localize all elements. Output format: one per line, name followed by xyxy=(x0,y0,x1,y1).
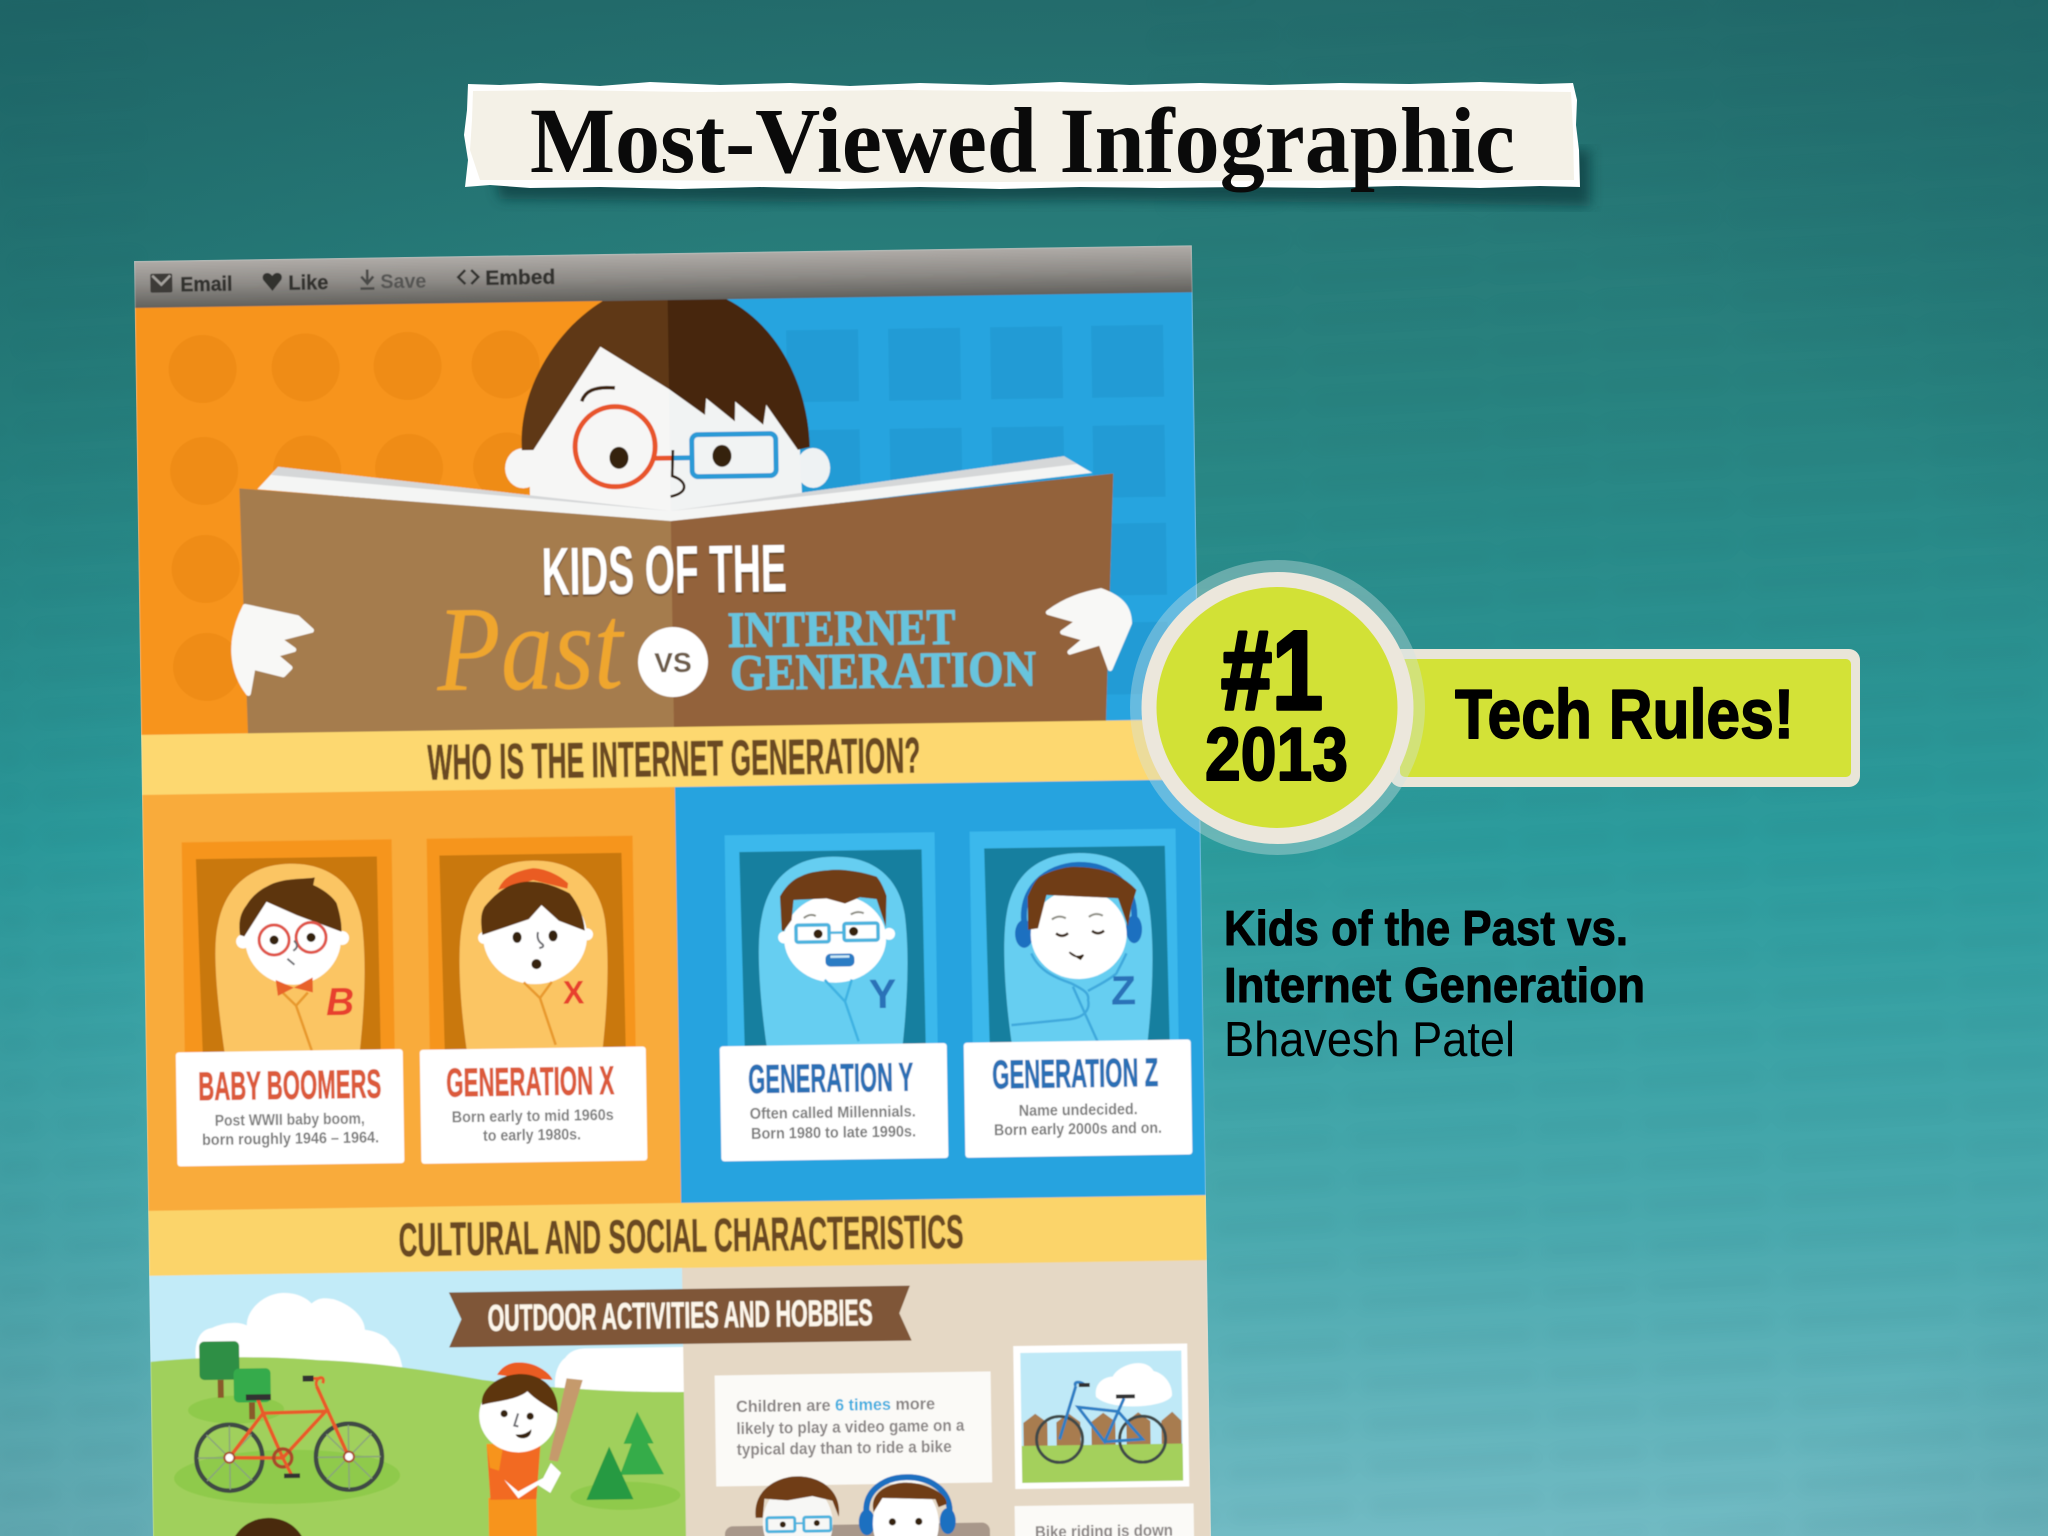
tan stats panel xyxy=(682,1260,1212,1536)
bike shadow xyxy=(174,1448,400,1506)
label card: Born early 2000s and on. xyxy=(994,1120,1162,1139)
panel: infographic screenshot xyxy=(134,245,1212,1536)
face xyxy=(527,336,804,545)
icon: embed xyxy=(458,270,478,284)
pine tree dark xyxy=(586,1446,633,1500)
callout: video game stat: Children are 6 times more xyxy=(736,1394,935,1416)
circle medal xyxy=(1130,560,1425,855)
icon: left hand xyxy=(233,605,312,694)
generations section xyxy=(142,779,1206,1211)
section band: who is the internet generation: WHO IS THE INTERNET GENERATION? xyxy=(427,727,921,791)
nose xyxy=(670,450,684,497)
tree shadow xyxy=(188,1395,284,1424)
eyes xyxy=(609,445,732,469)
red round glasses xyxy=(575,406,656,487)
badge: vs xyxy=(637,627,709,698)
icon: heart xyxy=(263,273,282,291)
infographic name: Internet Generation xyxy=(1224,959,1645,1013)
window frame xyxy=(970,829,1179,1044)
label card: Born 1980 to late 1990s. xyxy=(751,1123,916,1143)
toolbar xyxy=(134,245,1193,308)
blue half xyxy=(675,779,1206,1203)
cover right xyxy=(670,473,1117,729)
credit text xyxy=(1224,902,1645,1067)
character: gen y xyxy=(757,856,909,1047)
paper shadow xyxy=(490,150,1590,206)
card: baby boomers xyxy=(173,839,404,1166)
card: generation z xyxy=(961,828,1192,1158)
character: gen x: X xyxy=(563,974,585,1011)
label card: GENERATION X xyxy=(446,1059,615,1105)
badge: vs: VS xyxy=(654,647,692,678)
section band: cultural and social characteristics xyxy=(148,1195,1207,1277)
heading: generation: GENERATION xyxy=(730,642,1037,702)
label card xyxy=(176,1049,404,1166)
label card: GENERATION Y xyxy=(748,1056,914,1102)
blue background with squares xyxy=(726,292,1197,722)
section band: who is the internet generation xyxy=(141,719,1200,795)
cloud left xyxy=(195,1291,402,1370)
label card xyxy=(964,1039,1192,1158)
circle medal: 2013 xyxy=(1205,712,1348,796)
picture: blue bicycle xyxy=(1013,1343,1189,1489)
label card: born roughly 1946 – 1964. xyxy=(202,1129,379,1149)
cover left xyxy=(239,482,674,735)
window frame xyxy=(725,832,938,1047)
pages xyxy=(257,455,1093,529)
label card: Post WWII baby boom, xyxy=(215,1111,365,1130)
title banner: torn paper xyxy=(464,82,1590,206)
grass hill xyxy=(150,1351,687,1536)
couch xyxy=(725,1522,991,1536)
icon: download xyxy=(360,269,374,289)
card: generation x xyxy=(417,836,647,1164)
icon: right hand xyxy=(1048,590,1130,669)
orange background with dots xyxy=(135,300,674,738)
hair left xyxy=(520,300,670,450)
character: boomer: B xyxy=(326,981,355,1024)
blue rectangular glasses xyxy=(692,434,776,477)
infographic name xyxy=(1224,902,1645,1013)
orange half xyxy=(142,787,681,1211)
title text: Most-Viewed Infographic xyxy=(530,90,1515,193)
callout: bike riding stat xyxy=(1015,1503,1195,1536)
character: gen z xyxy=(1003,852,1154,1043)
hair right xyxy=(668,298,810,452)
card: generation y xyxy=(717,832,948,1161)
award badge xyxy=(1130,560,1860,855)
callout: video game stat xyxy=(715,1371,992,1486)
label card: Often called Millennials. xyxy=(750,1103,916,1123)
bottom-left kid hair xyxy=(229,1517,307,1536)
open book xyxy=(239,454,1117,735)
label card: GENERATION Z xyxy=(992,1051,1158,1097)
heading: kids of the: KIDS OF THE xyxy=(541,530,787,610)
header illustration xyxy=(135,292,1199,738)
heading: internet: INTERNET xyxy=(727,600,956,659)
banner: tech rules xyxy=(1390,649,1860,787)
character: gen x xyxy=(458,860,609,1050)
pine tree light xyxy=(619,1411,664,1475)
label card: to early 1980s. xyxy=(483,1126,581,1145)
label: Email: Email xyxy=(180,274,233,296)
character: two kids on couch xyxy=(724,1473,991,1536)
callout: video game stat: likely to play a video game on a xyxy=(736,1416,965,1438)
boy head xyxy=(504,298,832,512)
callout: video game stat: typical day than to ride a bike xyxy=(737,1437,952,1459)
torn paper strip xyxy=(464,82,1580,189)
infographic name: Kids of the Past vs. xyxy=(1224,902,1628,956)
ribbon: outdoor activities and hobbies xyxy=(448,1286,912,1347)
circle medal: #1 xyxy=(1221,608,1323,733)
label card xyxy=(420,1046,647,1164)
section band: cultural and social characteristics: CULTURAL AND SOCIAL CHARACTERISTICS xyxy=(398,1205,964,1266)
tan background xyxy=(682,1260,1212,1536)
eyebrow xyxy=(582,387,615,401)
heading: Past: Past xyxy=(435,580,626,718)
ribbon: outdoor activities and hobbies: OUTDOOR ACTIVITIES AND HOBBIES xyxy=(487,1292,873,1339)
window frame xyxy=(182,839,395,1054)
cloud right xyxy=(554,1347,684,1395)
label card: Name undecided. xyxy=(1019,1101,1138,1120)
kid with headphones xyxy=(858,1476,956,1536)
label: Embed: Embed xyxy=(485,267,555,290)
character: baseball kid xyxy=(478,1361,586,1536)
label card: BABY BOOMERS xyxy=(198,1062,382,1109)
kid with glasses xyxy=(755,1476,840,1536)
label card xyxy=(720,1043,948,1161)
tree back xyxy=(199,1341,240,1398)
label: Like: Like xyxy=(288,272,329,295)
tree front xyxy=(233,1368,271,1420)
icon: email xyxy=(150,273,172,293)
banner: tech rules: Tech Rules! xyxy=(1455,675,1794,753)
ears xyxy=(504,447,832,490)
outdoor activities scene xyxy=(149,1268,687,1536)
icon: red bicycle xyxy=(195,1377,382,1492)
label card: Born early to mid 1960s xyxy=(452,1107,614,1126)
author: Bhavesh Patel xyxy=(1224,1013,1515,1067)
sky xyxy=(149,1268,687,1536)
glasses bridge xyxy=(655,455,692,461)
pine shadow xyxy=(570,1481,681,1511)
label: Save: Save xyxy=(380,271,427,293)
window frame xyxy=(427,836,636,1051)
character: gen y: Y xyxy=(869,971,897,1017)
character: boomer xyxy=(214,863,366,1054)
character: gen z: Z xyxy=(1111,967,1136,1014)
